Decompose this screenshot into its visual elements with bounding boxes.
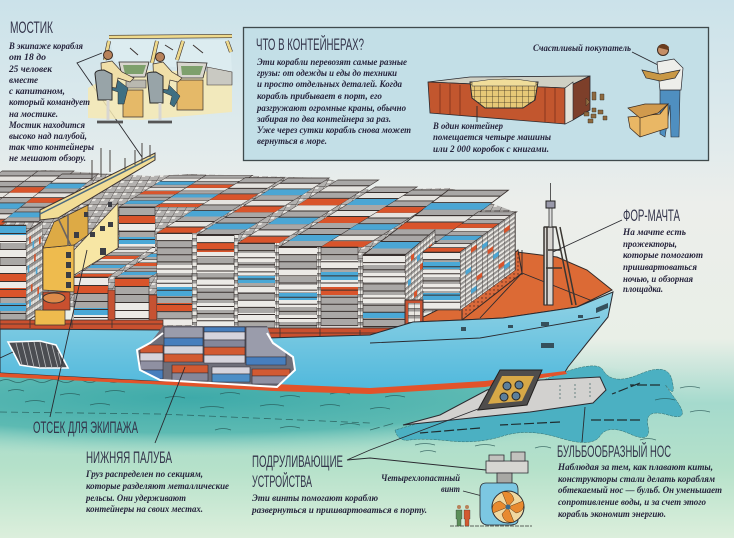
text: bulbous bow: обтекаемый нос — бульб. Он уменьшает <box>558 485 722 496</box>
text: foremast: которые помогают <box>623 250 703 261</box>
text: containers: Эти корабли перевозят самые разные <box>257 57 408 68</box>
text: thrusters: развернуться и пришвартоваться в порту. <box>251 505 427 516</box>
text: bridge: с капитаном, <box>9 86 65 97</box>
text: foremast: площадка. <box>623 284 663 295</box>
bow interior <box>413 250 612 322</box>
text: bridge: который командует <box>9 97 90 108</box>
text: lower deck: Груз распределен по секциям, <box>85 469 203 480</box>
text: thrusters: Эти винты помогают кораблю <box>252 493 378 504</box>
heading: foremast: ФОР-МАЧТА <box>623 207 680 225</box>
text: bridge: не мешают обзору. <box>9 153 86 164</box>
text: bulbous bow: сопротивление воды, и за счет этого <box>558 497 706 508</box>
text: bridge: В экипаже корабля <box>8 41 83 52</box>
text: bridge: на мостике. <box>9 109 58 120</box>
fore mast <box>544 183 576 305</box>
text: containers: Уже через сутки корабль снова может <box>257 125 411 136</box>
text: foremast <box>622 227 703 295</box>
heading: thrusters: УСТРОЙСТВА <box>252 472 312 491</box>
text: lower deck <box>85 469 230 515</box>
text: bridge <box>8 41 94 164</box>
text: bulbous bow: Наблюдая за тем, как плавают киты, <box>557 462 713 473</box>
label: four-blade propeller: Четырехлопастный <box>381 473 461 484</box>
label: capacity: В один контейнер <box>432 121 503 132</box>
text: containers: забирая по два контейнера за раз. <box>256 114 391 125</box>
container stack H <box>279 187 417 329</box>
callout line: lower deck <box>155 367 185 443</box>
hull <box>0 292 613 391</box>
text: containers: и просто отдельных деталей. Когда <box>257 79 402 90</box>
text: bridge: высоко над палубой, <box>9 131 87 142</box>
container stack G <box>238 180 379 328</box>
icon: container <box>428 76 607 124</box>
superstructure <box>35 143 155 325</box>
heading: crew: ОТСЕК ДЛЯ ЭКИПАЖА <box>33 419 138 437</box>
text: lower deck: которые разделяют металлические <box>86 481 230 492</box>
container stack E <box>157 178 284 325</box>
panel: what is in containers <box>244 28 708 160</box>
container stack J <box>363 190 508 327</box>
label: four-blade propeller <box>381 473 461 495</box>
heading: bridge: МОСТИК <box>10 19 53 37</box>
text: bulbous bow: корабль экономит энергию. <box>558 509 666 520</box>
text: containers: корабль прибывает в порт, его <box>257 91 382 102</box>
heading: thrusters: ПОДРУЛИВАЮЩИЕ <box>252 453 343 471</box>
label: capacity: помещается четыре машины <box>433 132 551 143</box>
label: customer: Счастливый покупатель <box>533 43 632 54</box>
text: bridge: вместе <box>9 75 39 86</box>
callout line: thrusters <box>347 409 486 470</box>
text: bridge: Мостик находится <box>8 120 85 131</box>
text: containers: вернуться в море. <box>257 136 327 147</box>
text: foremast: На мачте есть <box>622 227 687 238</box>
container stack C <box>108 248 194 325</box>
text: foremast: прожекторы, <box>623 239 677 250</box>
sea <box>0 340 690 456</box>
label: capacity <box>432 121 551 155</box>
icon: people for scale <box>456 505 470 526</box>
bridge illustration <box>88 36 232 122</box>
bulbous bow <box>403 370 660 433</box>
callout line: foremast <box>553 220 622 252</box>
text: bulbous bow <box>557 462 722 520</box>
hull details <box>370 317 600 343</box>
hull red stripe <box>0 371 567 394</box>
text: foremast: ночью, и обзорная <box>623 274 693 285</box>
far-left container rows <box>0 171 98 322</box>
text: containers: разгружают огромные краны, обычно <box>256 103 406 114</box>
text: containers <box>256 57 411 147</box>
lower deck cutaway <box>137 326 295 387</box>
container filler row behind D <box>155 175 253 207</box>
heading: thrusters <box>252 453 343 491</box>
callout line: bulb <box>582 407 585 442</box>
text: containers: грузы: от одежды и еды до техники <box>257 68 398 79</box>
container top mass <box>0 170 515 330</box>
label: four-blade propeller: винт <box>441 484 460 495</box>
heading: lower deck: НИЖНЯЯ ПАЛУБА <box>86 449 172 467</box>
callout line: bridge <box>77 53 142 157</box>
container stack D <box>119 175 206 252</box>
callout line: customer <box>632 52 658 65</box>
container stack F <box>197 178 329 327</box>
crew compartment cutaway <box>8 341 68 368</box>
heading: containers: ЧТО В КОНТЕЙНЕРАХ? <box>256 35 364 54</box>
text: lower deck: контейнеры на своих местах. <box>86 504 203 515</box>
text: bridge: так что контейнеры <box>9 142 94 153</box>
label: capacity: или 2 000 коробок с книгами. <box>433 144 549 155</box>
container stack B <box>74 247 153 322</box>
text: bridge: от 18 до <box>9 52 46 63</box>
water shadow around bulb <box>395 366 682 443</box>
callout line: crew <box>0 250 87 417</box>
text: bulbous bow: конструкторы стали делать кораблям <box>558 474 715 485</box>
container stack K <box>405 212 517 330</box>
icon: customer with box <box>628 44 683 137</box>
text: thrusters <box>251 493 427 516</box>
text: bridge: 25 человек <box>8 64 53 75</box>
icon: thruster <box>450 452 532 526</box>
text: lower deck: рельсы. Они удерживают <box>85 493 186 504</box>
waves <box>0 380 710 452</box>
container stack I <box>321 190 454 330</box>
deck rails <box>0 320 405 340</box>
ship <box>0 143 660 433</box>
text: foremast: пришвартоваться <box>623 262 697 273</box>
callout line: propeller <box>463 491 490 498</box>
